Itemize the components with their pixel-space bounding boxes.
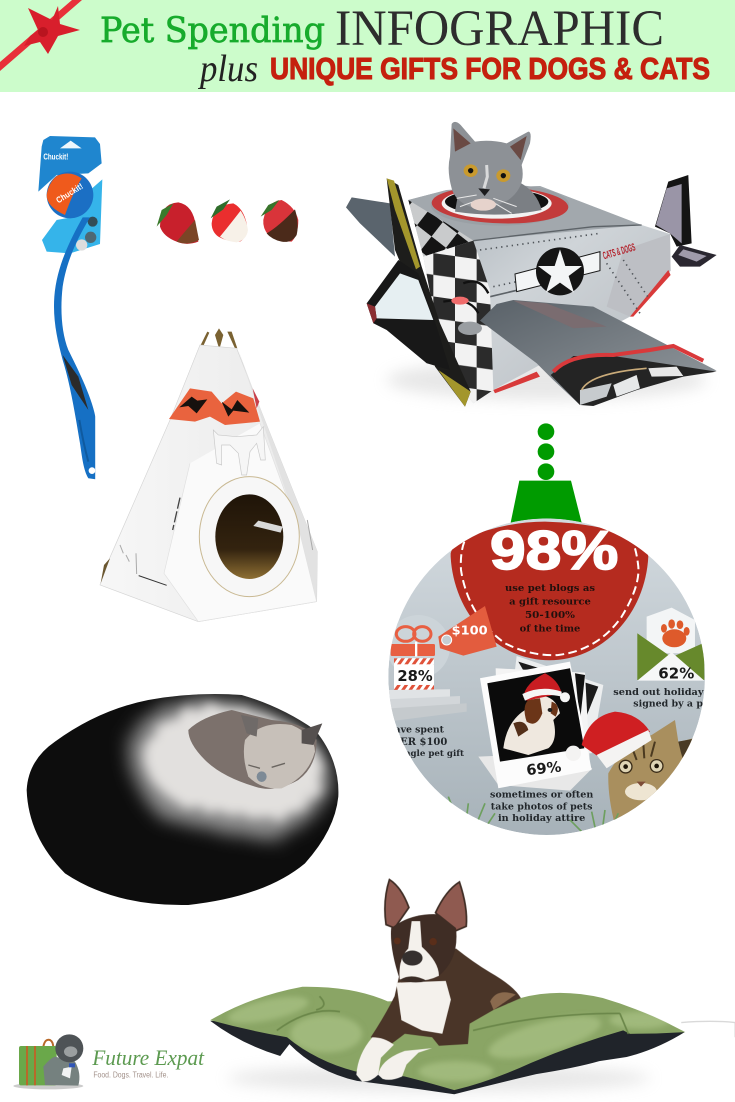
product: felt cat cave bed	[27, 694, 338, 905]
stat: 98%: 98%	[490, 519, 618, 581]
stat text: pet blogs: use pet blogs as	[505, 583, 596, 594]
bull skull cutout	[213, 427, 265, 475]
stat text: holiday cards	[614, 688, 704, 708]
cockpit ring	[431, 184, 569, 226]
logo name: Future Expat	[91, 1045, 205, 1070]
handle	[54, 217, 95, 479]
stat text: holiday attire: sometimes or often	[490, 791, 594, 801]
grey felt fringe	[128, 697, 332, 840]
front wing	[480, 300, 717, 406]
stat text: holiday cards: send out holiday cards	[613, 688, 735, 698]
tail	[655, 175, 717, 267]
photo stack	[478, 656, 603, 791]
dog ears	[385, 880, 409, 928]
fuselage	[408, 186, 671, 403]
red banner	[451, 519, 648, 660]
strawberry: white chocolate	[211, 199, 248, 242]
dog	[356, 880, 521, 1082]
pillow top	[210, 987, 685, 1090]
bed shadow	[227, 1065, 651, 1092]
ornament beads	[538, 423, 554, 480]
orange zigzag band	[169, 388, 260, 425]
grass	[448, 796, 619, 832]
felt bed body	[27, 694, 338, 905]
stat text: pet blogs	[505, 583, 596, 634]
plane shadow	[387, 360, 707, 400]
sleeping cat	[188, 710, 322, 789]
strawberry: milk chocolate	[157, 202, 199, 244]
title: Pet Spending: Pet Spending	[100, 11, 325, 51]
ornament cap	[511, 481, 582, 523]
teepee body	[100, 345, 317, 622]
ornament infographic	[388, 423, 705, 835]
package card: Chuckit!	[43, 152, 68, 161]
rear wing	[346, 197, 395, 257]
cat in cockpit	[449, 122, 542, 215]
dog mascot	[43, 1034, 83, 1086]
stat text: pet blogs: of the time	[520, 623, 580, 634]
header banner	[0, 0, 735, 92]
stat text: over $100	[396, 726, 464, 758]
gift icon	[389, 622, 450, 690]
pillow highlights	[226, 991, 671, 1082]
propeller	[367, 178, 471, 407]
pillow base	[210, 1017, 685, 1094]
felt top shading	[128, 697, 332, 840]
product: airplane cat house: CATS & DOGS	[601, 241, 637, 262]
paw print	[661, 619, 690, 647]
logo tagline: Food. Dogs. Travel. Life.	[93, 1070, 168, 1079]
door hole	[215, 494, 283, 579]
stat: 69%: 69%	[526, 759, 562, 779]
dog paws	[356, 1037, 394, 1082]
stat text: over $100: OVER $100	[384, 737, 447, 748]
stat text: holiday attire: in holiday attire	[498, 814, 586, 824]
product: ball launcher toy	[38, 136, 102, 479]
product: cardboard teepee	[100, 328, 317, 622]
product: airplane cat house	[346, 122, 717, 407]
stat text: over $100: on a single pet gift	[372, 749, 464, 759]
stat text: pet blogs: 50-100%	[525, 610, 575, 621]
white felt top	[143, 707, 323, 820]
stat text: holiday attire: take photos of pets	[491, 802, 592, 812]
nose checkers	[408, 200, 493, 403]
suitcase	[19, 1040, 57, 1085]
logo: Future Expat	[13, 1034, 205, 1089]
ribbon and bow	[0, 0, 82, 71]
title: INFOGRAPHIC: INFOGRAPHIC	[335, 1, 664, 57]
package card	[38, 136, 102, 253]
stat: 62%: 62%	[658, 665, 695, 682]
US star insignia	[515, 247, 600, 295]
strawberry: dark chocolate	[261, 200, 298, 242]
price tag: $100	[452, 622, 488, 637]
stat: 28%: 28%	[397, 668, 433, 685]
product: green pillow bed with dog	[210, 880, 735, 1094]
subtitle: plus: plus	[197, 48, 258, 90]
stat text: over $100: have spent	[388, 725, 445, 736]
stat text: pet blogs: a gift resource	[509, 596, 591, 607]
cord	[681, 1021, 735, 1037]
ornament ball contents	[388, 518, 705, 835]
cat in santa hat	[566, 712, 692, 820]
ball: Chuckit!	[54, 181, 85, 205]
door ring	[199, 477, 299, 597]
price tag	[438, 606, 497, 656]
basset hound in santa hat	[503, 673, 570, 755]
stat text: holiday attire	[490, 791, 594, 824]
teepee poles	[201, 328, 237, 349]
product: strawberry toys	[157, 199, 298, 244]
logo shadow	[13, 1083, 83, 1089]
dog head	[391, 914, 456, 982]
envelope with paw	[637, 608, 704, 682]
stairs pedestal	[387, 689, 467, 722]
stat text: holiday cards: signed by a pet	[633, 700, 714, 710]
ball	[47, 172, 93, 218]
